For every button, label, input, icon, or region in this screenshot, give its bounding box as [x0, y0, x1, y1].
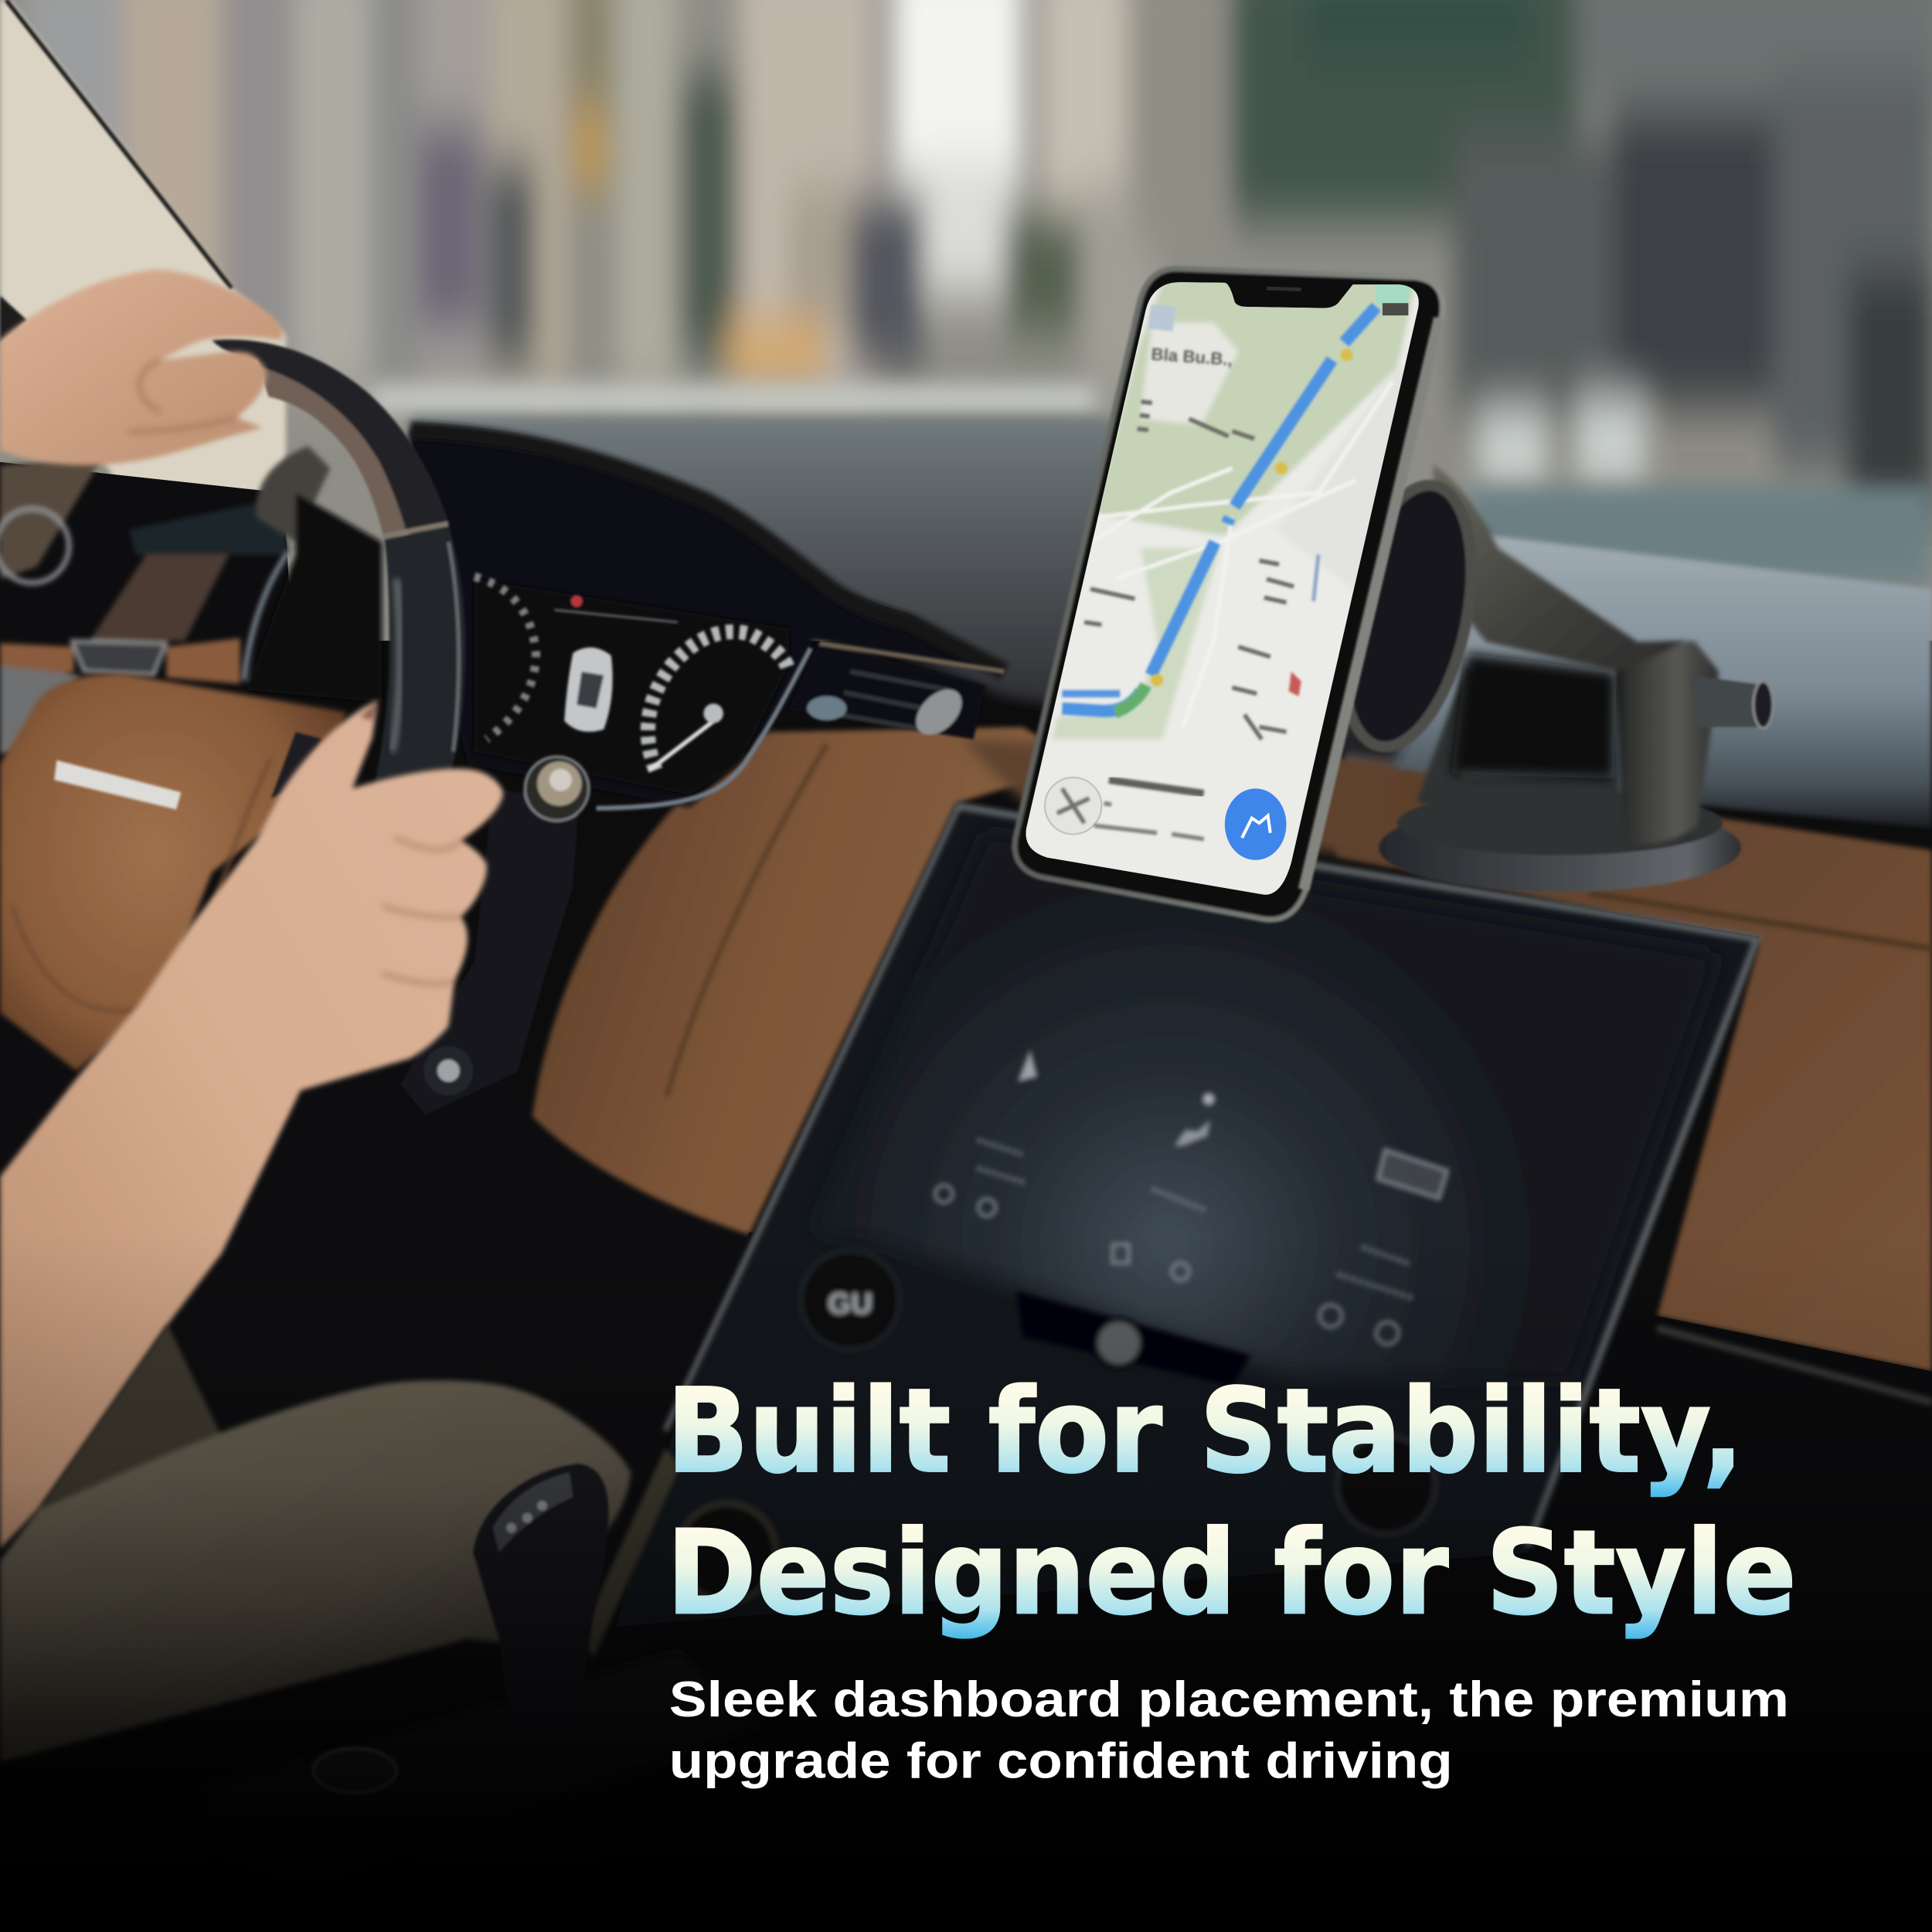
mount rear column	[1614, 641, 1719, 845]
phone right metal side	[1304, 318, 1439, 889]
left door and far gauge	[0, 454, 290, 754]
map green areas	[1053, 277, 1417, 740]
subheading	[669, 1671, 1789, 1789]
phone mount	[1321, 464, 1773, 892]
heading: Designed for Style	[667, 1506, 1797, 1641]
left dark interior	[0, 462, 764, 1602]
centre console surround	[579, 1232, 1932, 1932]
hub switch	[271, 732, 323, 798]
heading: Built for Stability,	[667, 1365, 1743, 1499]
hood stitched edge	[410, 430, 1004, 672]
climate controls	[678, 1250, 1435, 1602]
touchscreen icons	[935, 1049, 1447, 1344]
mount base	[1379, 791, 1741, 892]
lower hand and arm	[0, 700, 503, 1549]
display panel	[474, 579, 788, 794]
map labels: Bla Bu.B.,	[1151, 345, 1233, 369]
wheel inner spoke, grey	[244, 446, 382, 702]
phone body	[1015, 269, 1443, 920]
rim wood insert	[261, 367, 406, 539]
mount arm	[1433, 464, 1688, 672]
mount window	[1451, 653, 1617, 779]
dashboard right, grey-blue	[1343, 524, 1932, 828]
magnetic disc	[1321, 474, 1492, 759]
hub seam	[12, 758, 271, 1011]
stalk and dial	[400, 757, 589, 1115]
route waypoint markers	[1151, 349, 1353, 686]
navigation panel	[1045, 777, 1287, 860]
phone	[1010, 269, 1443, 920]
map labels	[1084, 304, 1318, 740]
dashboard top, textured grey	[410, 417, 1491, 764]
dark trim band under right leather	[1657, 1328, 1932, 1402]
brown dash strip beneath phone	[961, 740, 1393, 862]
phone speaker	[1267, 288, 1301, 290]
chrome trim	[597, 648, 811, 808]
steering wheel rim	[212, 339, 465, 794]
mount front leg	[1417, 665, 1627, 842]
subheading: upgrade for confident driving	[669, 1733, 1453, 1789]
gauges	[474, 577, 788, 770]
windshield pillar	[0, 0, 286, 493]
steering wheel hub	[0, 674, 346, 1071]
go button	[1225, 788, 1287, 860]
upper hand	[0, 270, 282, 465]
map roads	[1091, 382, 1393, 572]
shirt fold	[39, 1325, 222, 1509]
heading	[667, 1365, 1797, 1641]
subheading: Sleek dashboard placement, the premium	[669, 1671, 1789, 1727]
climate controls: GU	[828, 1287, 872, 1321]
leather dash left	[532, 727, 1084, 1235]
phone screen	[1026, 282, 1419, 895]
driver's leg	[0, 1380, 631, 1762]
tension knob	[1691, 675, 1773, 728]
console side beige trim	[579, 1447, 680, 1657]
bottom dark gradient overlay	[0, 1232, 1932, 1932]
destination marker	[1375, 284, 1410, 315]
gear shifter	[313, 1464, 609, 1793]
central touchscreen	[616, 804, 1760, 1627]
leather dash right	[1325, 758, 1932, 1372]
blue route	[1062, 307, 1376, 713]
air vent	[788, 643, 1004, 743]
instrument cluster	[406, 430, 1004, 808]
hub chrome badge	[54, 760, 181, 810]
gear base plate	[209, 1651, 764, 1885]
